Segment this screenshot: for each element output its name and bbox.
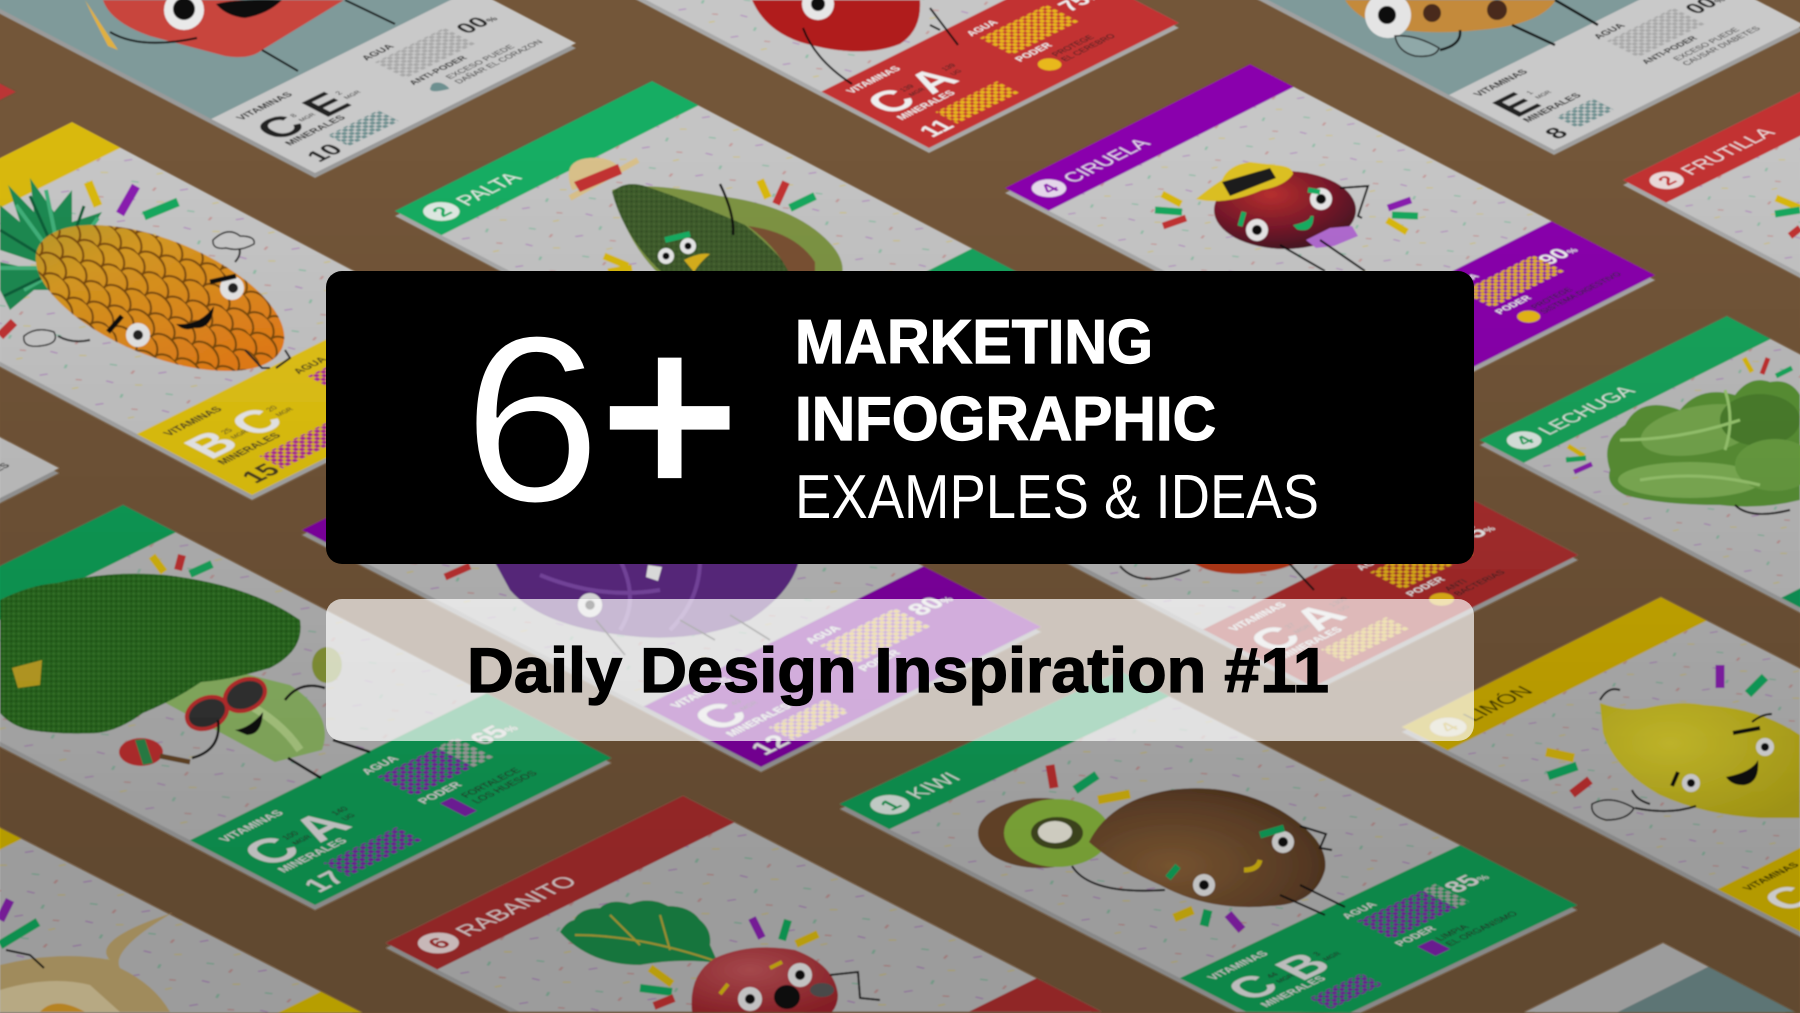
card: plum: PROTEGE [1528, 286, 1575, 310]
card: kiwi: 85% [1438, 868, 1496, 896]
card: avocado [395, 81, 1082, 441]
card: cookie [1144, 0, 1800, 155]
card: plum: PODER [1493, 294, 1535, 316]
fruit: broccoli [0, 574, 370, 778]
card: pineapple: MGR [274, 407, 295, 418]
heading: marketing: MARKETING [795, 308, 1153, 377]
card: plum: CIRUELA [1058, 136, 1156, 186]
card: kiwi: VITAMINAS [1205, 950, 1272, 982]
card: strawberry: 2 [1653, 173, 1683, 188]
card: pineapple: 25 [219, 427, 235, 435]
card: plum: SISTEMA DIGESTIVO [1537, 271, 1624, 315]
card: broccoli: AGUA [358, 754, 402, 776]
card: tomato: UG [1337, 605, 1352, 612]
card: burger red character on teal [0, 0, 576, 178]
fruit: avocado [569, 158, 843, 275]
card: strawberry: FRUTILLA [1676, 125, 1781, 178]
card: apple: A [895, 61, 970, 100]
card: kiwi: AGUA [1340, 901, 1380, 921]
card: purple cabbage: AGUA [803, 625, 844, 645]
card: purple cabbage: VITAMINAS [669, 676, 735, 710]
card: broccoli: FORTALECE [459, 767, 524, 800]
card: lettuce: LECHUGA [1534, 383, 1641, 438]
card: cookie: CAUSAR DIABETES [1680, 25, 1763, 67]
card: pineapple: C [217, 402, 297, 443]
card: lemon [1402, 597, 1800, 950]
card: pineapple: VITAMINAS [161, 405, 226, 438]
card: radish: RABANITO [449, 873, 584, 940]
card: lettuce: 4 [1511, 433, 1541, 448]
card: cookie: E [1482, 87, 1552, 123]
card: cookie: MGR [1534, 90, 1554, 100]
card: radish: 6 [422, 934, 457, 953]
fruit: tomato [1120, 560, 1314, 590]
card: burger red character on teal: C [243, 108, 317, 146]
card: pineapple: 15 [234, 460, 287, 487]
card: broccoli: VITAMINAS [216, 808, 287, 844]
card: burger red character on teal: 10 [301, 141, 349, 165]
fruit: banana [0, 900, 172, 1012]
subtitle text: Daily Design Inspiration #11 [467, 636, 1329, 706]
card: burger red character on teal: MGR [298, 112, 318, 123]
card: burger red character on teal: 00% [450, 10, 503, 37]
card: pineapple: B [172, 424, 252, 465]
heading: infographic: INFOGRAPHIC [795, 385, 1216, 454]
confetti: lemon [1546, 665, 1765, 794]
card: broccoli: 17 [297, 867, 354, 896]
card: cookie: VITAMINAS [1472, 68, 1531, 98]
card: tomato: AGUA [1353, 552, 1393, 572]
card: apple: PODER [1013, 42, 1056, 63]
card: tomato: PODER [1403, 575, 1449, 598]
card: broccoli: A [278, 805, 364, 849]
card: left red corner [0, 0, 16, 217]
card: purple cabbage: C [679, 695, 761, 737]
card: tomato: ANTI [1442, 578, 1470, 592]
card: kiwi: B [1263, 946, 1344, 987]
big number: 6 [463, 287, 601, 552]
card: tomato: 1300 [1326, 596, 1351, 608]
card: pineapple: MGR [229, 429, 250, 440]
card: broccoli: MINERALES [274, 836, 350, 874]
card: tomato: VITAMINAS [1226, 601, 1290, 633]
card: cookie: 1 [1524, 90, 1536, 96]
card: lettuce [1480, 316, 1800, 657]
card: pineapple: MINERALES [215, 432, 284, 466]
card: bottom right teal [1524, 943, 1795, 1013]
card: kiwi [840, 671, 1577, 1013]
fruit: plum [1196, 162, 1368, 271]
card: banana [0, 813, 362, 1013]
card: plum [1005, 64, 1655, 404]
confetti: broccoli [152, 555, 212, 574]
card: kiwi: 44 [1264, 971, 1281, 979]
card: burger red character on teal: VITAMINAS [235, 91, 296, 122]
card: apple: AGUA [964, 19, 1002, 38]
confetti: pineapple [0, 182, 178, 336]
card: broccoli: C [229, 829, 315, 873]
confetti: lettuce [1566, 358, 1792, 472]
card: kiwi: MINERALES [1258, 975, 1330, 1009]
card: burger red character on teal: E [290, 86, 362, 123]
card: burger red character on teal: 8 [288, 113, 299, 118]
card: tomato: BACTERIAS [1451, 569, 1508, 597]
card: broccoli: 140 [329, 805, 351, 816]
card: purple cabbage: 12 [744, 731, 797, 758]
card: burger red character on teal: MINERALES [283, 114, 349, 147]
card: burger red character on teal: 2 [333, 90, 345, 96]
card: plum: AGUA [1446, 273, 1482, 291]
card: left gray corner [0, 243, 59, 603]
card: tomato: 37 [1282, 622, 1298, 630]
card: cookie: 8 [1539, 124, 1575, 143]
card: lemon: LIMÓN [1458, 684, 1539, 724]
card: pineapple [0, 122, 522, 500]
card: radish [386, 796, 1101, 1013]
confetti: strawberry [1775, 198, 1800, 236]
card: tomato [883, 330, 1578, 692]
card: broccoli: MGR [290, 834, 314, 846]
card: tomato: C [1236, 619, 1313, 658]
big number: + [602, 286, 737, 545]
card: kiwi: MGR [1320, 951, 1343, 962]
card: apple: 139 [897, 83, 916, 93]
card: broccoli: 65% [462, 717, 524, 749]
card: apple: VITAMINAS [844, 65, 904, 95]
card: apple: MGR [907, 87, 927, 97]
title panel [326, 271, 1474, 564]
fruit: apple [752, 0, 958, 84]
card: cookie: MINERALES [1521, 92, 1585, 124]
card: pineapple: 20 [264, 404, 280, 413]
card: apple: 139 [939, 62, 958, 72]
heading: examples and ideas: EXAMPLES & IDEAS [795, 463, 1319, 532]
card: avocado: 2 [427, 204, 458, 220]
card: kiwi: C [1214, 968, 1292, 1007]
card: cookie: AGUA [1592, 22, 1629, 41]
fruit: radish [560, 900, 880, 1012]
card: kiwi: 1 [873, 796, 907, 813]
card: apple: 11 [913, 116, 961, 141]
card: apple: EL CEREBRO [1058, 33, 1118, 63]
card: pineapple: AGUA [291, 356, 331, 376]
card: broccoli: LOS HUESOS [470, 770, 541, 805]
confetti: plum [1155, 194, 1418, 232]
card: kiwi: PODER [1393, 925, 1440, 948]
card: cookie: ANTI-PODER [1639, 35, 1700, 65]
card: kiwi: MGR [1273, 973, 1297, 984]
card: apple: PROTEGE [1049, 34, 1097, 58]
card: strawberry [1623, 58, 1800, 395]
card: plum: 4 [1035, 181, 1066, 196]
card: broccoli: 100 [279, 830, 301, 841]
card: kiwi: EL ORGANISMO [1443, 910, 1521, 948]
card: broccoli [0, 505, 611, 910]
subtitle panel [326, 599, 1474, 741]
card: tomato: 95% [1446, 519, 1501, 547]
card: broccoli: UG [339, 812, 358, 821]
fruit: pineapple [0, 178, 304, 401]
card: lemon: 4 [1434, 720, 1465, 735]
character: red burger [85, 0, 395, 71]
card: burger red character on teal: DAÑAR EL CORAZON [452, 38, 545, 85]
fruit: lettuce [1607, 380, 1800, 514]
card: purple cabbage: 80% [901, 589, 959, 619]
card: apple: UG [949, 69, 964, 76]
character: cookie [1345, 0, 1598, 56]
card: kiwi: KIWI [899, 769, 967, 802]
card: avocado: PALTA [451, 170, 528, 209]
card: kiwi: 3 [1311, 951, 1323, 957]
card: apple [509, 0, 1179, 153]
confetti: radish [640, 918, 818, 1006]
card: burger red character on teal: AGUA [360, 43, 398, 62]
card: kiwi: LIMPIA [1433, 923, 1472, 942]
card: apple: C [854, 82, 928, 120]
card: purple cabbage: 49 [727, 698, 745, 707]
card: burger red character on teal: MGR [343, 90, 363, 100]
confetti: kiwi [1050, 765, 1242, 930]
card: broccoli: PODER [414, 780, 466, 806]
card: cookie: EXCESO PUEDE [1671, 26, 1742, 62]
card: plum: 90% [1532, 241, 1583, 268]
card: burger red character on teal: ANTI-PODER [406, 54, 470, 86]
card: apple: MINERALES [895, 89, 959, 122]
big number [463, 286, 737, 552]
card: tomato: MINERALES [1278, 626, 1346, 660]
card: burger red character on teal: EXCESO PUEDE [443, 43, 517, 80]
card: tomato: A [1280, 597, 1357, 636]
fruit: lemon [1592, 689, 1800, 820]
card: purple cabbage: PODER [856, 649, 903, 673]
card: purple cabbage: MGR [737, 700, 760, 711]
card: tomato: MGR [1293, 624, 1313, 634]
card: purple cabbage: MINERALES [724, 702, 795, 738]
card: purple cabbage [302, 390, 1041, 772]
fruit: purple cabbage [445, 555, 800, 655]
fruit: kiwi [978, 788, 1345, 915]
